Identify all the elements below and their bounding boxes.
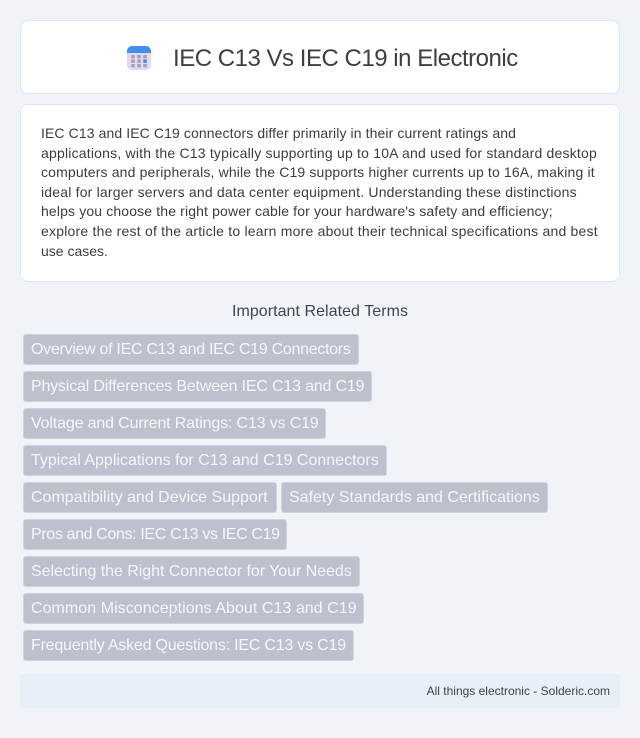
footer — [20, 674, 620, 708]
tag — [23, 445, 387, 476]
tag — [23, 556, 360, 587]
tag — [23, 408, 326, 439]
panel: term tags — [23, 334, 548, 661]
tag — [23, 630, 354, 661]
tag: Selecting the Right Connector for Your Needs — [31, 563, 352, 580]
tag: Common Misconceptions About C13 and C19 — [31, 600, 357, 617]
text block: summary paragraph: helps you choose the right power cable for your hardware's safety and efficiency; — [41, 203, 553, 219]
text block: summary paragraph: ideal for larger servers and data center equipment. Understanding these distinctions — [41, 184, 577, 200]
panel: header — [20, 20, 620, 94]
text block: summary paragraph: IEC C13 and IEC C19 connectors differ primarily in their current ratings and — [41, 125, 516, 141]
tag: Pros and Cons: IEC C13 vs IEC C19 — [31, 526, 280, 543]
tag — [23, 371, 372, 402]
tag: Frequently Asked Questions: IEC C13 vs C19 — [31, 637, 346, 654]
tag — [23, 519, 287, 550]
tag: Typical Applications for C13 and C19 Connectors — [31, 452, 379, 469]
text block: summary paragraph: explore the rest of the article to learn more about their technical specifications and best — [41, 223, 598, 239]
tag: Voltage and Current Ratings: C13 vs C19 — [31, 415, 319, 432]
tag — [23, 593, 364, 624]
text block: summary paragraph: computers and peripherals, while the C19 supports higher currents up to 16A, making it — [41, 164, 595, 180]
tag: Compatibility and Device Support — [31, 489, 268, 506]
heading: related terms: Important Related Terms — [232, 303, 408, 320]
tag — [23, 334, 359, 365]
tag — [23, 482, 277, 513]
text block: summary paragraph: use cases. — [41, 243, 108, 259]
tag: Safety Standards and Certifications — [289, 489, 540, 506]
text block: summary paragraph: applications, with the C13 typically supporting up to 10A and used for standard desktop — [41, 145, 597, 161]
footer: All things electronic - Solderic.com — [427, 684, 610, 698]
panel: summary — [20, 104, 620, 282]
tag: Overview of IEC C13 and IEC C19 Connectors — [31, 341, 351, 358]
tag: Physical Differences Between IEC C13 and C19 — [31, 378, 364, 395]
tag — [281, 482, 548, 513]
icon: calendar grid — [127, 46, 151, 70]
text block: summary paragraph — [41, 125, 598, 259]
title: IEC C13 Vs IEC C19 in Electronic — [173, 45, 518, 72]
